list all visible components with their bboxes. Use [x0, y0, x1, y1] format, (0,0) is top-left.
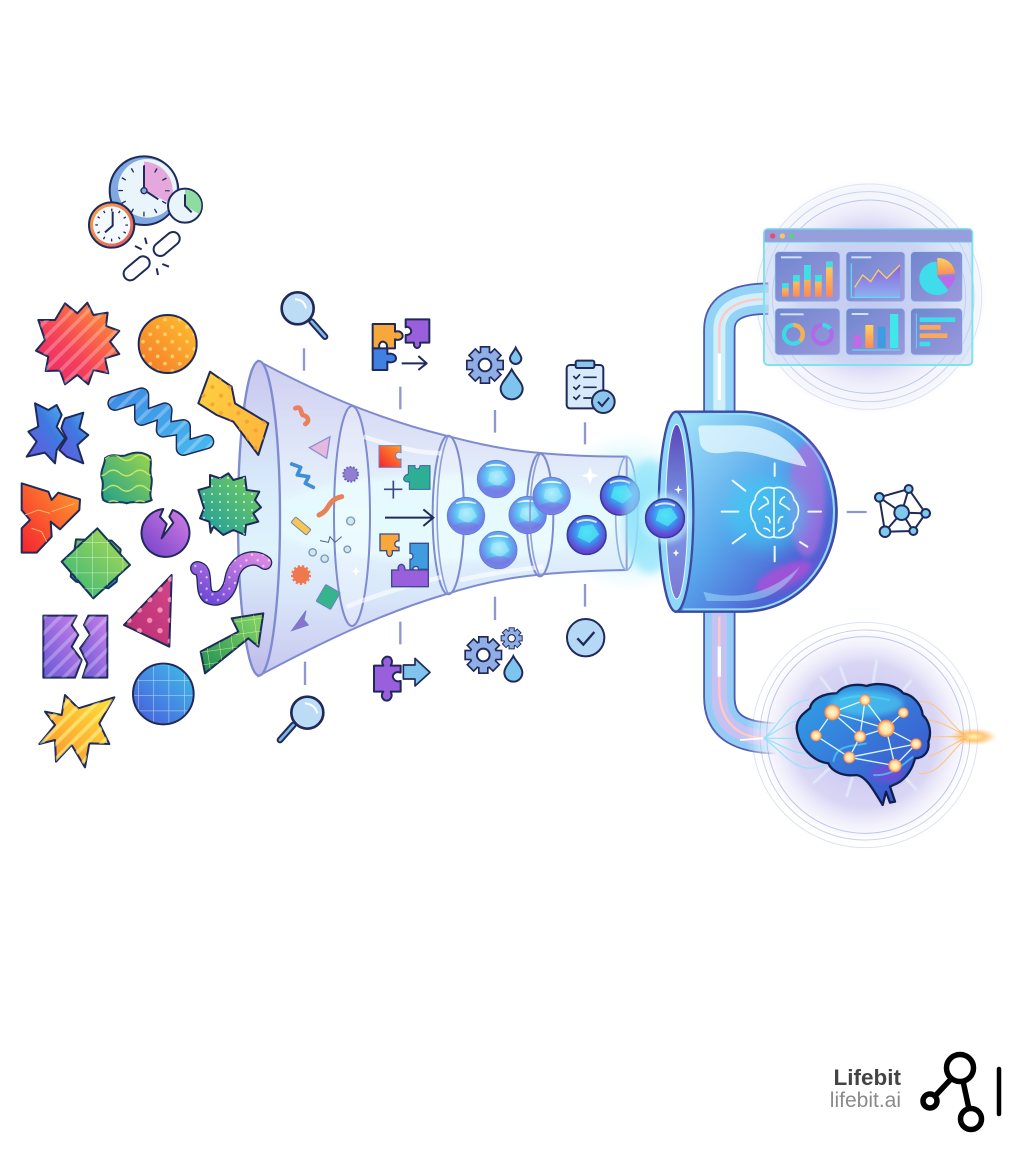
icon: green clock: [168, 189, 202, 223]
clocks and broken chain: [27, 156, 268, 463]
shape: green dotted star: [198, 473, 261, 535]
dash: puzzle top: [397, 387, 404, 409]
shape: pink triangle: [124, 575, 172, 647]
dash: gear bottom: [491, 597, 498, 620]
logo bar: [997, 1069, 1001, 1114]
icon: gear and drops top: [468, 348, 523, 399]
funnel ring 2: [334, 406, 370, 626]
panel: bar chart: [775, 252, 840, 302]
icon: check circle: [567, 619, 604, 656]
icon: network: [875, 485, 930, 537]
brain network links: [816, 700, 916, 766]
shape: orange cracked block: [22, 483, 80, 553]
dashboard window: [764, 229, 972, 365]
glow behind funnel exit: [480, 430, 708, 594]
brain folds: [833, 696, 913, 775]
brain colour blobs: [830, 691, 903, 716]
brain nodes: [810, 694, 922, 772]
icon: brain in bowl: [722, 463, 821, 561]
dashboard halo: [756, 183, 982, 410]
puzzle pieces in funnel: [379, 446, 433, 587]
bowl opening: [659, 412, 693, 612]
dashboard output: [719, 183, 982, 413]
brain halo: [752, 622, 978, 848]
panel: pie chart: [911, 252, 962, 302]
top icons over funnel: [280, 292, 615, 740]
shape: red spiky star: [36, 303, 119, 384]
panel: column chart: [846, 308, 905, 355]
shape: orange dotted circle: [139, 315, 197, 373]
icon: orange clock: [89, 202, 134, 248]
shape: blue grid circle: [133, 664, 194, 724]
funnel mouth ring: [238, 361, 280, 676]
icon: puzzle top: [373, 319, 429, 370]
funnel ring 5: [616, 457, 638, 570]
panel: line chart: [846, 252, 905, 302]
flare: [950, 728, 997, 745]
icon: large clock: [110, 156, 178, 225]
dash: puzzle bottom: [397, 622, 404, 644]
shape: purple squiggle: [197, 558, 265, 598]
lower chaotic shapes: [22, 453, 265, 767]
dash: network: [847, 508, 867, 515]
bowl purple glow: [788, 443, 825, 557]
dash: check: [581, 584, 588, 607]
nerve fibres right: [918, 701, 968, 774]
raw debris in funnel: [291, 408, 358, 631]
icon: gears and drop bottom: [466, 628, 522, 682]
brand logo: [830, 1054, 999, 1130]
logo mark: [923, 1054, 982, 1130]
pipe to brain: [719, 610, 780, 738]
shape: yellow torn ribbon: [198, 372, 268, 455]
bowl: [659, 412, 837, 612]
bowl rays: [722, 463, 821, 561]
dash: gear top: [491, 410, 498, 433]
nerve fibres left: [740, 700, 827, 768]
funnel ring 4: [527, 454, 553, 576]
shape: green wavy square: [101, 453, 152, 503]
bowl cyan glow: [727, 477, 807, 550]
shape: yellow star: [39, 695, 114, 767]
funnel: [238, 361, 639, 676]
icon: broken chain: [121, 229, 182, 283]
ring front arcs: [437, 436, 540, 594]
icon: magnifier bottom: [280, 697, 323, 740]
sparkles in opening: [673, 485, 683, 557]
front orb: [640, 493, 690, 543]
spheres: [447, 460, 639, 569]
bowl rim inner: [683, 414, 834, 609]
shape: blue broken star: [27, 403, 88, 463]
dash: clipboard: [581, 422, 588, 444]
funnel body: [258, 361, 627, 676]
dash: magnifier bottom: [301, 662, 308, 685]
icon: magnifier top: [282, 292, 325, 337]
funnel inner glow: [270, 475, 617, 562]
processing bowl and lower output: [623, 412, 997, 848]
dash: magnifier top: [300, 348, 307, 371]
brain: [797, 684, 930, 805]
panel: horizontal bars: [911, 308, 962, 355]
brain rays: [813, 660, 917, 797]
shape: purple cracked circle: [141, 509, 189, 557]
brand name: Lifebit: [834, 1065, 901, 1090]
brand url: lifebit.ai: [830, 1089, 901, 1112]
icon: puzzle and arrow bottom: [374, 657, 430, 701]
funnel ring 3: [433, 436, 464, 594]
bowl dome: [676, 412, 837, 612]
window dots: [770, 233, 794, 239]
bowl gloss: [698, 425, 807, 467]
panel: donut charts: [775, 308, 840, 355]
pipe to dashboard: [719, 299, 768, 413]
shape: green arrow: [201, 613, 263, 673]
icon: clipboard: [567, 361, 615, 413]
sparkles: [351, 467, 598, 576]
glow around bowl opening: [623, 460, 677, 573]
shape: purple broken rectangle: [43, 616, 107, 678]
title bar: [764, 229, 972, 242]
shape: green grid diamond: [62, 528, 130, 598]
funnel highlight streaks: [347, 437, 543, 607]
shape: blue zigzag: [115, 395, 207, 448]
